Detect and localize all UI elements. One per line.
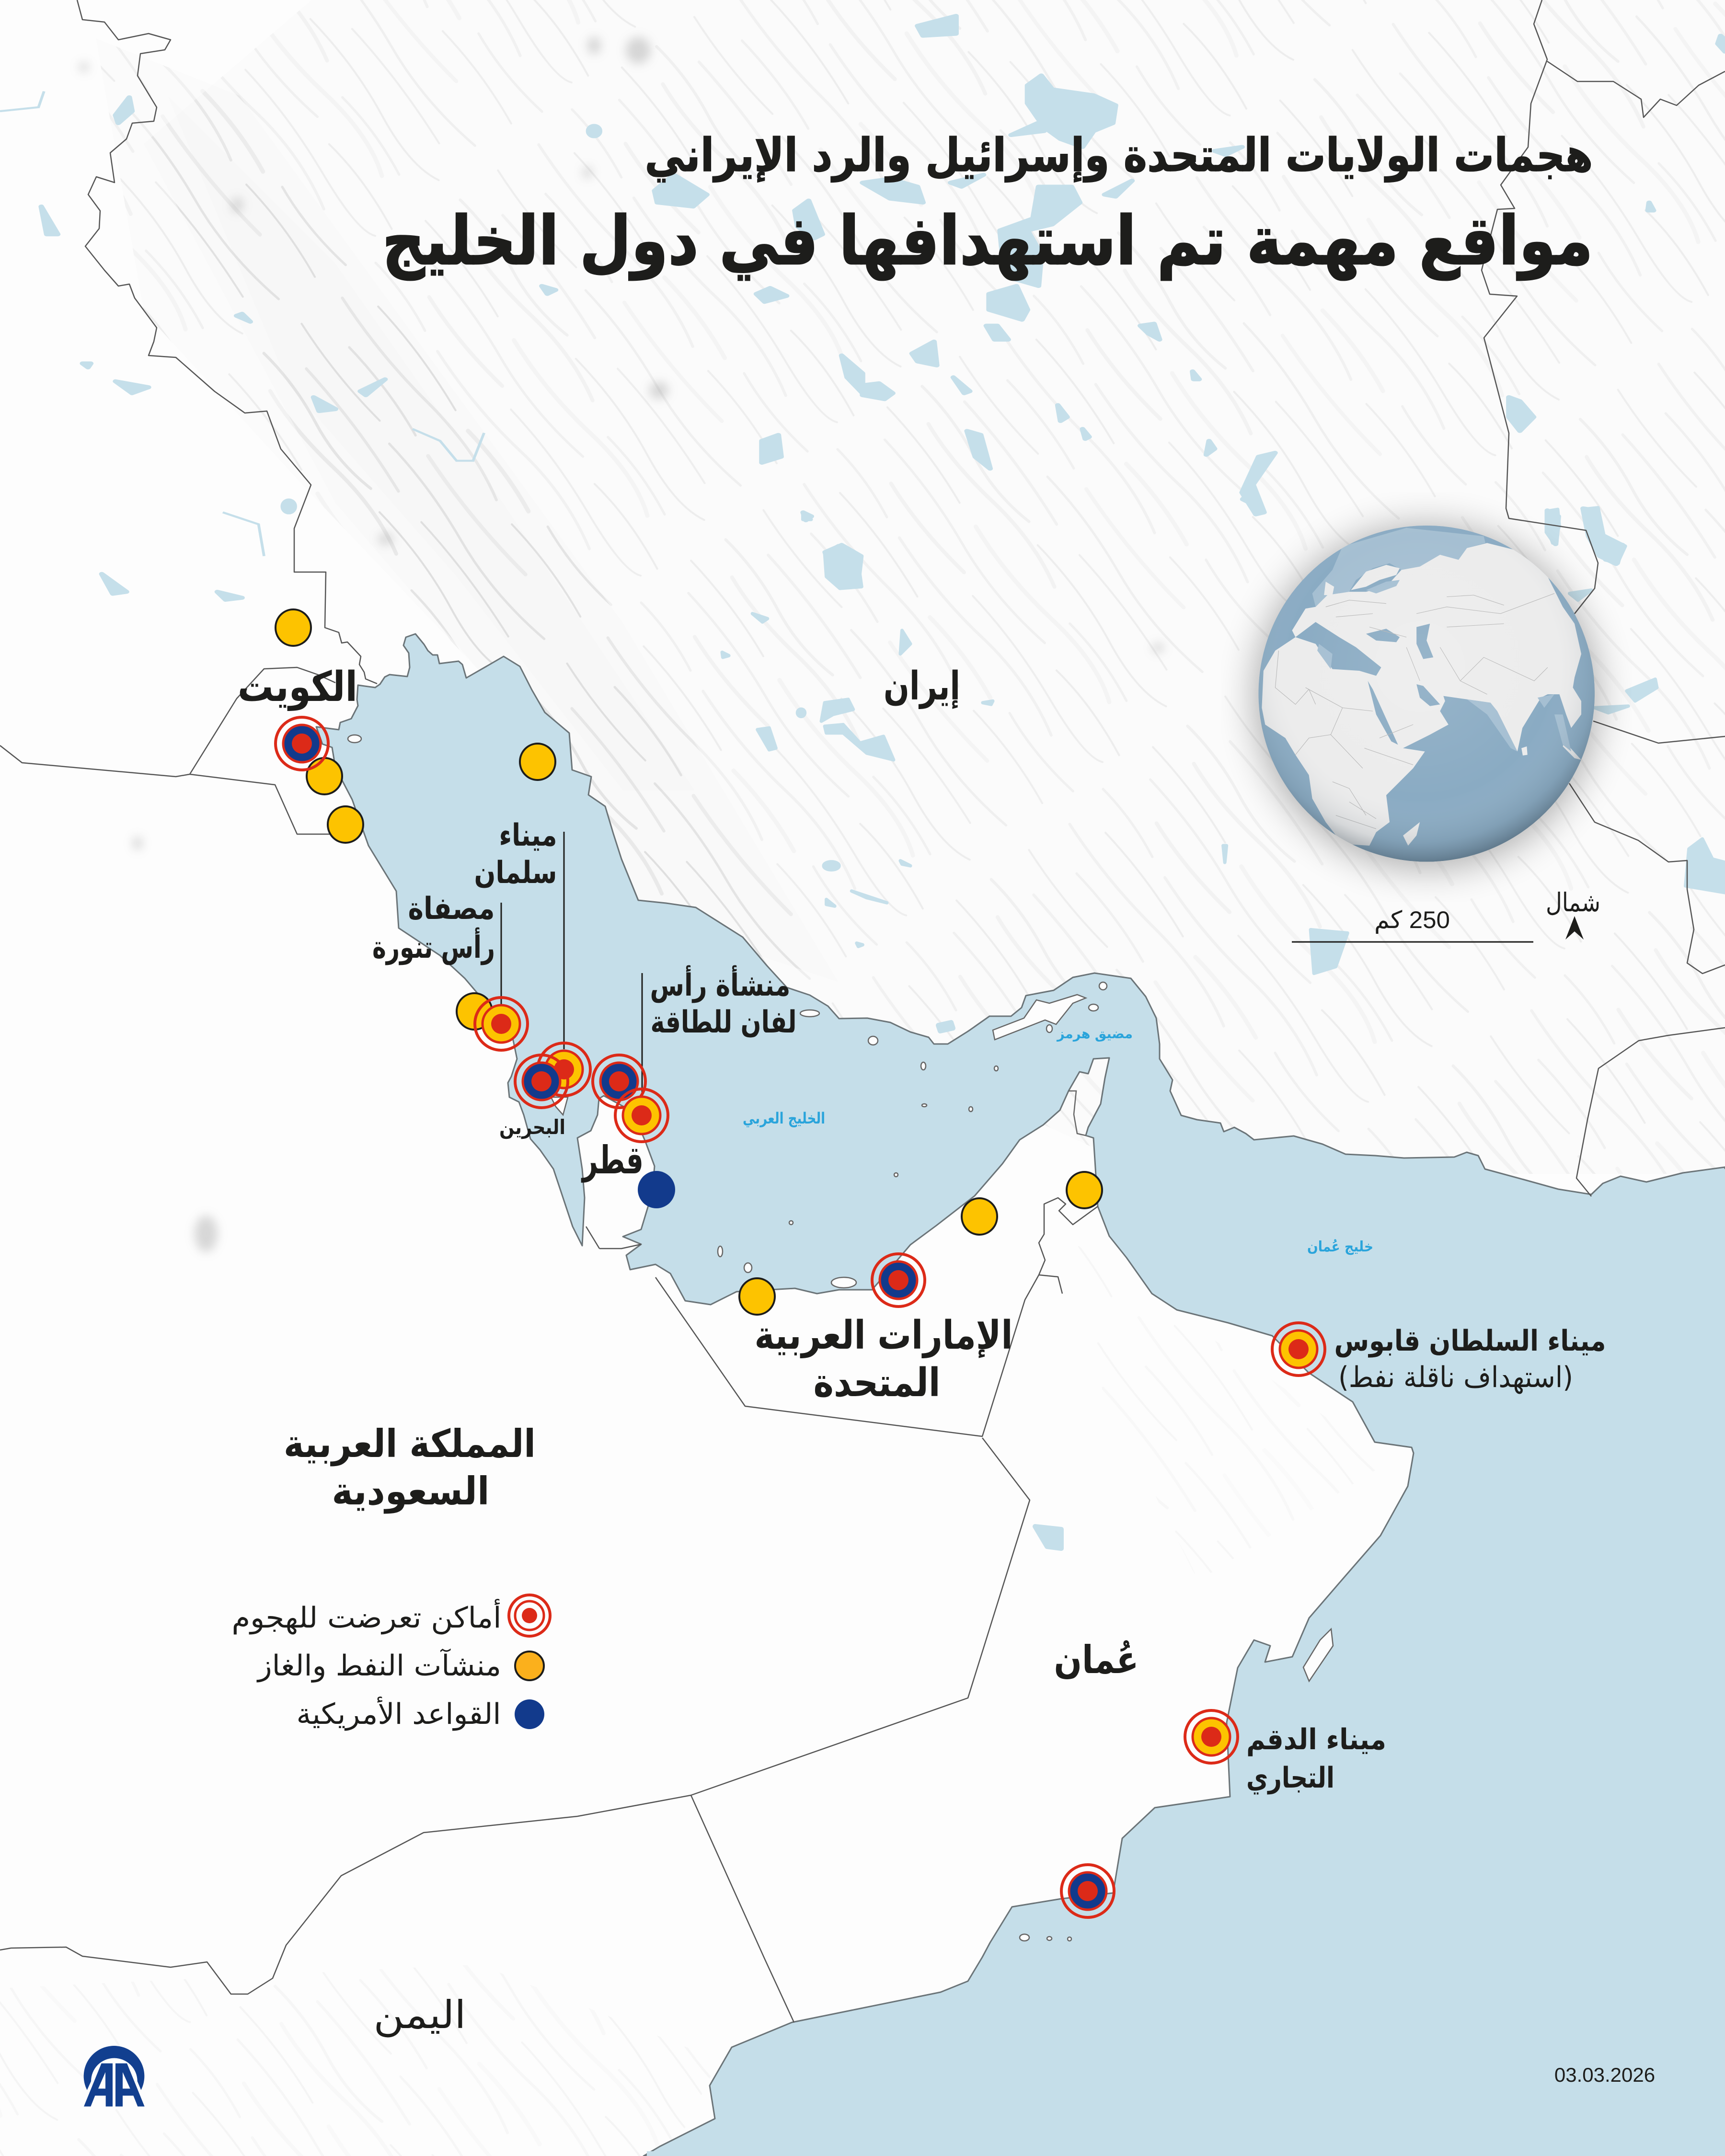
attack target: Oman base xyxy=(1061,1865,1114,1917)
north arrow: شمال xyxy=(1546,887,1600,917)
label: Ras Laffan facility: لفان للطاقة xyxy=(651,1005,796,1040)
inland seas xyxy=(1366,580,1400,594)
legend xyxy=(232,1595,550,1731)
land masses xyxy=(1262,543,1581,846)
globe inset xyxy=(1256,526,1597,868)
country label: UAE: الإمارات العربية xyxy=(754,1313,1013,1359)
label: Sultan Qaboos port xyxy=(1334,1324,1606,1394)
sea label: Arabian Gulf: الخليج العربي xyxy=(743,1109,825,1127)
urban areas xyxy=(79,37,1164,1252)
legend: US bases: القواعد الأمريكية xyxy=(296,1697,501,1731)
label: Ras Tanura refinery xyxy=(372,891,495,965)
label: Mina Salman xyxy=(474,818,557,891)
lakes: central Iran north xyxy=(862,16,1725,564)
sea label: Gulf of Oman: خليج عُمان xyxy=(1307,1239,1373,1255)
legend: attacked sites: أماكن تعرضت للهجوم xyxy=(232,1599,501,1635)
attack target: Qatar base north xyxy=(593,1055,645,1108)
label: Bahrain: البحرين xyxy=(499,1115,565,1139)
country label: UAE xyxy=(754,1313,1013,1406)
country label: Saudi Arabia xyxy=(284,1422,536,1514)
label: Mina Salman: سلمان xyxy=(474,855,557,891)
globe shading xyxy=(1258,526,1595,862)
legend: attacked sites xyxy=(232,1595,550,1636)
country label: Yemen: اليمن xyxy=(374,1993,466,2038)
terrain tint xyxy=(96,0,1725,1174)
lake: Minab coast xyxy=(938,1022,953,1031)
country label: Oman: عُمان xyxy=(1054,1638,1138,1682)
attack target: Mina Salman xyxy=(538,1043,590,1096)
label: Duqm port: ميناء الدقم xyxy=(1246,1723,1386,1756)
globe shadow xyxy=(1256,527,1597,868)
label: Duqm port xyxy=(1246,1723,1386,1795)
ocean xyxy=(1258,526,1595,862)
north arrow xyxy=(1546,887,1600,940)
lakes: central Iran south xyxy=(722,513,993,947)
lakes: east xyxy=(1223,489,1725,974)
attack target: Sultan Qaboos port xyxy=(1272,1323,1325,1376)
label: Ras Laffan facility xyxy=(650,965,796,1040)
label: Ras Tanura refinery: رأس تنورة xyxy=(372,927,495,965)
country label: Kuwait: الكويت xyxy=(238,663,357,711)
legend: oil and gas facilities: منشآت النفط والغاز xyxy=(256,1648,501,1683)
islands xyxy=(348,735,1333,1941)
sea label: Strait of Hormuz: مضيق هرمز xyxy=(1056,1026,1133,1042)
sea: Arabian Gulf, Gulf of Oman and Arabian Sea xyxy=(316,634,1725,2156)
AA logo xyxy=(84,2046,145,2107)
label: Duqm port: التجاري xyxy=(1246,1761,1334,1795)
label: Sultan Qaboos port: (استهداف ناقلة نفط) xyxy=(1338,1361,1573,1394)
label: Sultan Qaboos port: ميناء السلطان قابوس xyxy=(1334,1324,1606,1358)
lake: Oman interior xyxy=(1035,1526,1061,1548)
label: Mina Salman: ميناء xyxy=(499,818,557,853)
main title line: مواقع مهمة تم استهدافها في دول الخليج xyxy=(382,202,1593,281)
title xyxy=(382,128,1593,281)
country label: Saudi Arabia: المملكة العربية xyxy=(284,1422,536,1467)
date: 03.03.2026 xyxy=(1554,2064,1655,2086)
country borders on globe xyxy=(1275,594,1554,829)
oil and gas markers xyxy=(276,609,1102,1315)
sea edge fill xyxy=(647,1169,1725,2156)
label: Ras Tanura refinery: مصفاة xyxy=(408,891,494,927)
country label: Qatar: قطر xyxy=(581,1138,644,1183)
shelf seas north xyxy=(1312,528,1485,607)
attack target: UAE base xyxy=(872,1254,925,1307)
attack target: Kuwait base xyxy=(276,717,328,770)
country label: Saudi Arabia: السعودية xyxy=(332,1469,490,1514)
country label: UAE: المتحدة xyxy=(814,1360,940,1406)
US base marker: Qatar xyxy=(638,1171,675,1208)
label: Ras Laffan facility: منشأة رأس xyxy=(650,965,791,1003)
attack target: Duqm port xyxy=(1185,1710,1238,1763)
leader lines xyxy=(501,832,642,1097)
country label: Iran: إيران xyxy=(884,664,960,710)
attack target: Bahrain base xyxy=(515,1055,568,1108)
subtitle line: هجمات الولايات المتحدة وإسرائيل والرد الإيراني xyxy=(645,128,1593,183)
lakes: northwest xyxy=(0,92,862,600)
scale bar: 250 كم xyxy=(1374,906,1450,934)
attack target: Ras Tanura xyxy=(475,998,528,1050)
attack target: Ras Laffan xyxy=(615,1089,668,1142)
